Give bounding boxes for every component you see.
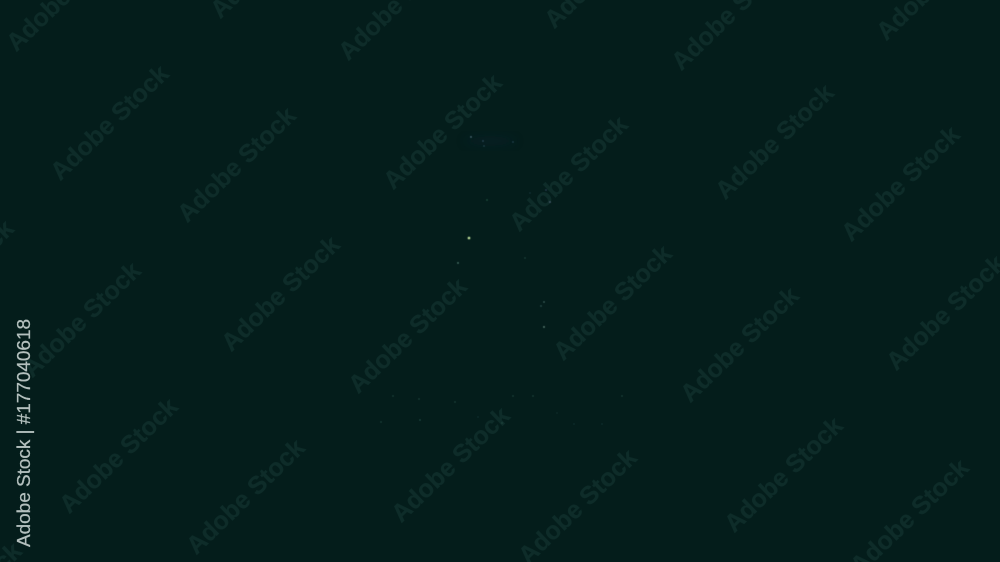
watermark pattern: Adobe Stock — [172, 102, 301, 228]
watermark pattern: Adobe Stock — [216, 231, 345, 357]
watermark pattern: Adobe Stock — [378, 69, 507, 195]
watermark pattern: Adobe Stock — [710, 79, 839, 205]
watermark pattern: Adobe Stock — [719, 412, 848, 538]
watermark pattern: Adobe Stock — [343, 273, 472, 399]
watermark pattern: Adobe Stock — [181, 434, 310, 560]
watermark pattern: Adobe Stock — [504, 111, 633, 237]
watermark pattern: Adobe Stock — [386, 402, 515, 528]
watermark pattern: Adobe Stock — [548, 240, 677, 366]
vertical stock id caption: Adobe Stock | #177040618 — [14, 319, 34, 547]
watermark pattern: Adobe Stock — [54, 393, 183, 519]
stars — [380, 136, 623, 425]
faint nebula — [464, 136, 516, 146]
watermark pattern: Adobe Stock — [17, 257, 146, 383]
watermark pattern: Adobe Stock — [675, 282, 804, 408]
watermark pattern: Adobe Stock — [45, 60, 174, 186]
watermark pattern: Adobe Stock — [836, 121, 965, 247]
